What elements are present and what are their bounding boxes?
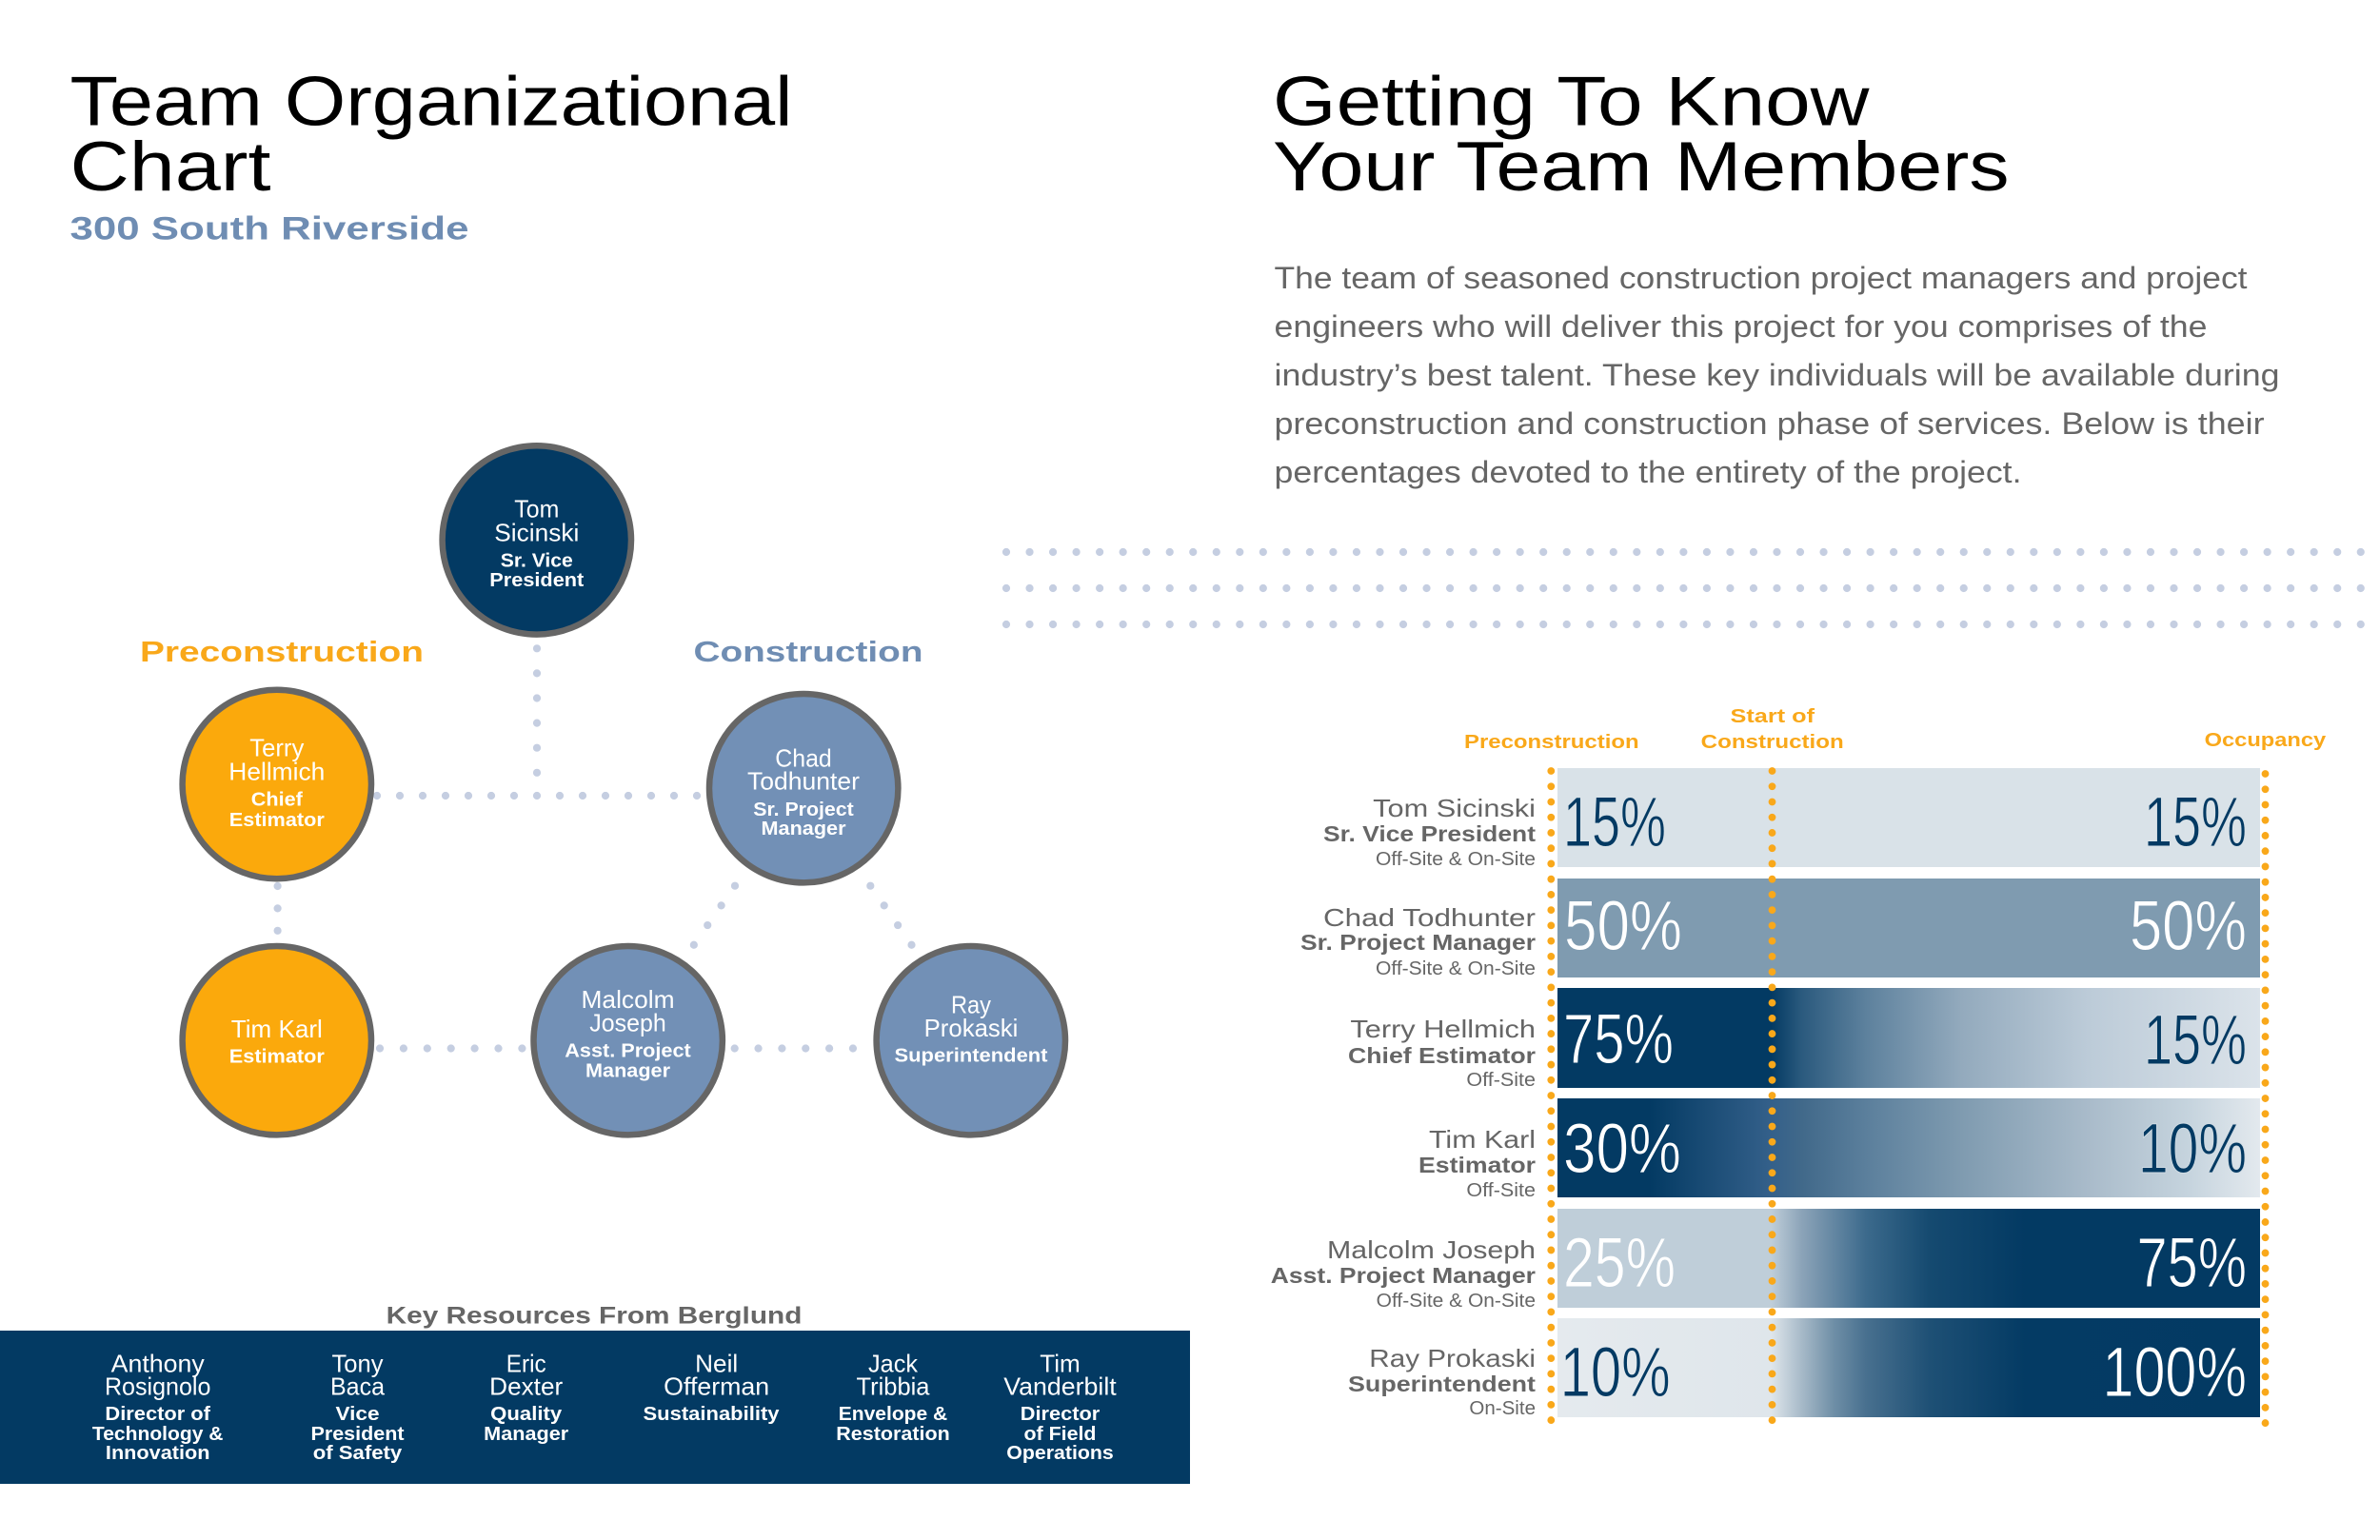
node: Ray Prokaski: [877, 946, 1065, 1135]
column label: preconstruction: Preconstruction: [1464, 732, 1639, 753]
column label: start of construction: Start of: [1731, 706, 1815, 727]
row: Tim Karl: Estimator: [1418, 1153, 1536, 1177]
row: Malcolm Joseph: 75%: [2136, 1223, 2247, 1302]
row: Terry Hellmich: Chief Estimator: [1348, 1043, 1536, 1068]
title: team organizational chart: Chart: [70, 128, 270, 206]
node: Malcolm Joseph: Manager: [585, 1060, 670, 1081]
node: Malcolm Joseph: Asst. Project: [565, 1041, 691, 1062]
resource: Neil Offerman: Offerman: [664, 1372, 769, 1401]
resource: Anthony Rosignolo: Anthony: [111, 1350, 205, 1378]
intro paragraph: The team of seasoned construction project managers and project: [1274, 261, 2248, 295]
row: Malcolm Joseph: Malcolm Joseph: [1327, 1235, 1536, 1264]
intro paragraph: [1274, 261, 2279, 489]
node: Terry Hellmich: [183, 690, 371, 879]
resource: Jack Tribbia: Jack: [868, 1350, 919, 1378]
node: Malcolm Joseph: Joseph: [589, 1008, 666, 1037]
resource: Anthony Rosignolo: Technology &: [92, 1424, 223, 1445]
node: Tom Sicinski: [443, 445, 631, 635]
row: Malcolm Joseph: 25%: [1563, 1223, 1676, 1302]
node: Ray Prokaski: Ray: [951, 990, 991, 1018]
row: Ray Prokaski: 10%: [1560, 1333, 1671, 1412]
resource: Tim Vanderbilt: Operations: [1006, 1443, 1114, 1464]
milestone line: start of construction: [1769, 771, 1775, 1422]
resource: Tony Baca: Baca: [330, 1372, 386, 1401]
row: Ray Prokaski: Superintendent: [1348, 1372, 1536, 1396]
row: Terry Hellmich: 75%: [1563, 999, 1674, 1078]
row: Terry Hellmich: Terry Hellmich: [1350, 1015, 1536, 1043]
row: Tom Sicinski: Tom Sicinski: [1373, 794, 1536, 822]
org chart: [140, 445, 1065, 1135]
row: Tim Karl: [1418, 1098, 2260, 1201]
connector: Tom to team: [533, 648, 541, 780]
node: Malcolm Joseph: [533, 946, 723, 1135]
row: Tom Sicinski: 15%: [1563, 782, 1666, 861]
row: Chad Todhunter: 50%: [1564, 886, 1682, 965]
resource: Jack Tribbia: [836, 1350, 950, 1445]
milestone line: preconstruction: [1547, 771, 1555, 1422]
resource: Tim Vanderbilt: of Field: [1024, 1424, 1097, 1445]
row: Tom Sicinski: Sr. Vice President: [1323, 821, 1536, 846]
row: Ray Prokaski: On-Site: [1469, 1398, 1536, 1419]
subtitle: address: 300 South Riverside: [70, 211, 468, 247]
node: Chad Todhunter: [709, 694, 898, 882]
row: Terry Hellmich: [1348, 988, 2260, 1091]
panel: key resources band: [0, 1331, 1190, 1484]
resource: Tim Vanderbilt: Tim: [1040, 1350, 1081, 1378]
node: Terry Hellmich: Hellmich: [228, 758, 325, 786]
row: Ray Prokaski: Ray Prokaski: [1369, 1344, 1536, 1372]
row: Malcolm Joseph: Off-Site & On-Site: [1377, 1291, 1536, 1312]
row: Tim Karl: Tim Karl: [1429, 1125, 1536, 1154]
node: Malcolm Joseph: Malcolm: [581, 985, 674, 1014]
node: Tom Sicinski: Sicinski: [494, 518, 579, 546]
title: getting to know your team members: Your Team Members: [1273, 128, 2009, 206]
row: Terry Hellmich: Off-Site: [1466, 1070, 1536, 1091]
resource: Jack Tribbia: Restoration: [836, 1424, 950, 1445]
resource: Tim Vanderbilt: Vanderbilt: [1003, 1372, 1118, 1401]
intro paragraph: preconstruction and construction phase of services. Below is their: [1274, 406, 2265, 441]
resource: Neil Offerman: Neil: [695, 1350, 738, 1378]
column label: occupancy: Occupancy: [2205, 730, 2327, 751]
heading: preconstruction: Preconstruction: [140, 635, 424, 668]
node: Terry Hellmich: Chief: [251, 790, 303, 811]
intro paragraph: percentages devoted to the entirety of the project.: [1274, 455, 2022, 489]
row: Ray Prokaski: 100%: [2102, 1333, 2247, 1412]
row: Tim Karl: 10%: [2138, 1109, 2247, 1188]
row: Chad Todhunter: Chad Todhunter: [1323, 903, 1536, 932]
node: Ray Prokaski: Superintendent: [895, 1046, 1048, 1067]
row: Malcolm Joseph: [1271, 1209, 2260, 1312]
resource: Anthony Rosignolo: Director of: [105, 1404, 210, 1425]
row: Chad Todhunter: Off-Site & On-Site: [1376, 958, 1536, 979]
row: Tom Sicinski: [1323, 768, 2260, 870]
row: Tim Karl: Off-Site: [1466, 1180, 1536, 1201]
row: Tom Sicinski: Off-Site & On-Site: [1376, 849, 1536, 870]
connector: Chad to Malcolm: [693, 886, 735, 946]
resource: Eric Dexter: Eric: [506, 1350, 546, 1378]
title: getting to know your team members: Getting To Know: [1273, 63, 1870, 141]
node: Tom Sicinski: Tom: [514, 495, 559, 523]
milestone line: occupancy: [2262, 774, 2269, 1425]
connector: Terry to Chad: [377, 792, 698, 800]
resource: Anthony Rosignolo: Innovation: [106, 1443, 209, 1464]
connector: Terry to Tim: [274, 886, 282, 938]
node: Chad Todhunter: Sr. Project: [753, 800, 854, 820]
row: Malcolm Joseph: Asst. Project Manager: [1271, 1263, 1536, 1288]
heading: key resources: Key Resources From Berglund: [387, 1302, 802, 1329]
resource: Anthony Rosignolo: [92, 1350, 223, 1464]
node: Chad Todhunter: Manager: [762, 819, 846, 839]
resource: Tony Baca: President: [310, 1424, 405, 1445]
intro paragraph: engineers who will deliver this project for you comprises of the: [1274, 309, 2207, 344]
node: Ray Prokaski: Prokaski: [924, 1014, 1018, 1042]
row: Ray Prokaski: [1348, 1318, 2260, 1419]
resource: Anthony Rosignolo: Rosignolo: [105, 1372, 210, 1401]
resource: Eric Dexter: Manager: [484, 1424, 568, 1445]
resource: Jack Tribbia: Envelope &: [839, 1404, 947, 1425]
resource: Eric Dexter: [484, 1350, 568, 1445]
row: Chad Todhunter: Sr. Project Manager: [1300, 930, 1536, 955]
resource: Tim Vanderbilt: Director: [1021, 1404, 1100, 1425]
connector: Chad to Ray: [870, 886, 912, 946]
node: Tom Sicinski: Sr. Vice: [501, 551, 573, 572]
node: Tom Sicinski: President: [489, 570, 585, 591]
resource: Neil Offerman: [644, 1350, 780, 1425]
connector: Malcolm to Ray: [735, 1044, 855, 1053]
resource: Tony Baca: of Safety: [313, 1443, 403, 1464]
row: Chad Todhunter: [1300, 879, 2260, 979]
resource: Eric Dexter: Quality: [490, 1404, 563, 1425]
resource: Jack Tribbia: Tribbia: [857, 1372, 930, 1401]
intro paragraph: industry’s best talent. These key individuals will be available during: [1274, 358, 2279, 392]
title: team organizational chart: Team Organizational: [70, 63, 792, 141]
node: Terry Hellmich: Estimator: [229, 810, 325, 831]
connector: Tim to Malcolm: [380, 1044, 524, 1053]
row: Terry Hellmich: 15%: [2144, 1000, 2247, 1079]
column label: start of construction: [1701, 706, 1844, 753]
title: getting to know your team members: [1273, 63, 2009, 206]
resource: Neil Offerman: Sustainability: [644, 1404, 780, 1425]
node: Tim Karl: Tim Karl: [231, 1015, 323, 1043]
column label: start of construction: Construction: [1701, 732, 1844, 753]
row: Tim Karl: 30%: [1563, 1109, 1681, 1188]
chart: time allocation by team member: [1271, 706, 2327, 1425]
row: Chad Todhunter: 50%: [2130, 886, 2247, 965]
resource: Tim Vanderbilt: [1003, 1350, 1118, 1464]
node: Tim Karl: [183, 946, 371, 1135]
node: Tim Karl: Estimator: [229, 1047, 325, 1068]
node: Chad Todhunter: Todhunter: [747, 767, 860, 796]
resource: Eric Dexter: Dexter: [489, 1372, 564, 1401]
node: Terry Hellmich: Terry: [249, 734, 304, 762]
resource: Tony Baca: [310, 1350, 405, 1464]
title: team organizational chart: [70, 63, 792, 206]
row: Tom Sicinski: 15%: [2144, 782, 2247, 861]
node: Chad Todhunter: Chad: [775, 744, 832, 773]
resource: Tony Baca: Vice: [335, 1404, 379, 1425]
heading: construction: Construction: [693, 635, 923, 668]
resource: Tony Baca: Tony: [331, 1350, 383, 1378]
